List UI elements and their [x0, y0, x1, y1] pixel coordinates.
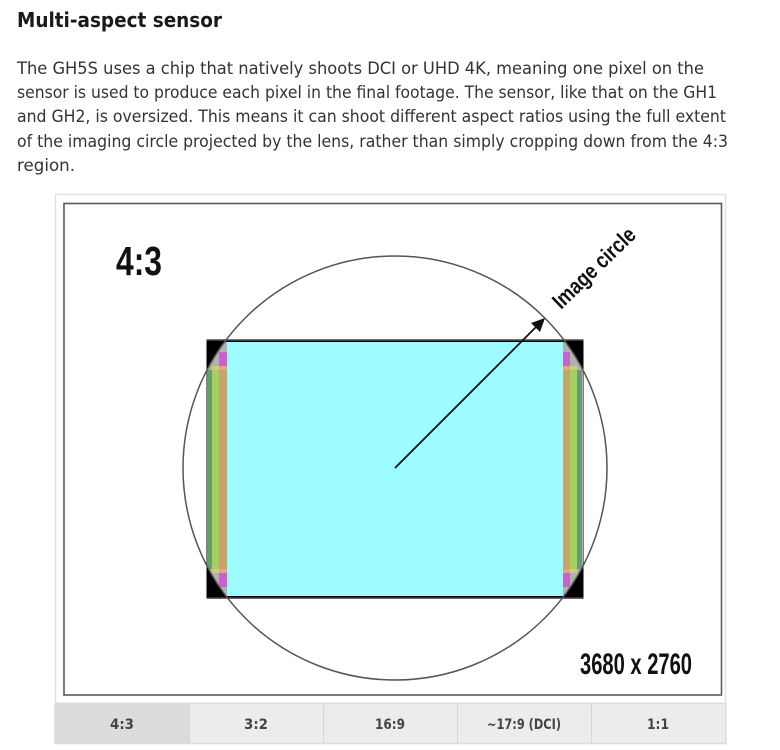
tab: 4:3 active	[56, 704, 189, 743]
tabs	[55, 704, 726, 744]
label: resolution: 3680 x 2760	[580, 648, 692, 681]
sensor	[206, 339, 584, 599]
panel: sensor diagram	[56, 194, 726, 704]
heading: Multi-aspect sensor	[17, 8, 222, 32]
tabs: 3:2	[244, 717, 268, 733]
tabs: 4:3	[110, 717, 134, 733]
right bands	[577, 370, 582, 569]
text block: description	[16, 59, 728, 176]
text block: description: region.	[17, 156, 75, 176]
tabs: 16:9	[375, 717, 405, 733]
text block: description: of the imaging circle projected by the lens, rather than simply cropping down from the 4:3	[17, 132, 728, 152]
text block: description: and GH2, is oversized. This means it can shoot different aspect ratios using the full extent	[17, 107, 726, 127]
arrow: radius	[395, 318, 545, 468]
left bands	[207, 370, 212, 569]
tabs: 1:1	[647, 717, 669, 733]
label: image circle: Image circle	[547, 222, 641, 314]
tabs: ~17:9 (DCI)	[487, 717, 561, 733]
text block: description: sensor is used to produce each pixel in the final footage. The sensor, like that on the GH1	[17, 83, 717, 103]
image frame	[56, 194, 726, 704]
image circle	[183, 256, 607, 680]
cyan area	[227, 342, 563, 596]
text block: description: The GH5S uses a chip that natively shoots DCI or UHD 4K, meaning one pixel on the	[16, 59, 704, 79]
diagram border	[64, 204, 722, 695]
label: aspect ratio: 4:3	[116, 238, 162, 284]
